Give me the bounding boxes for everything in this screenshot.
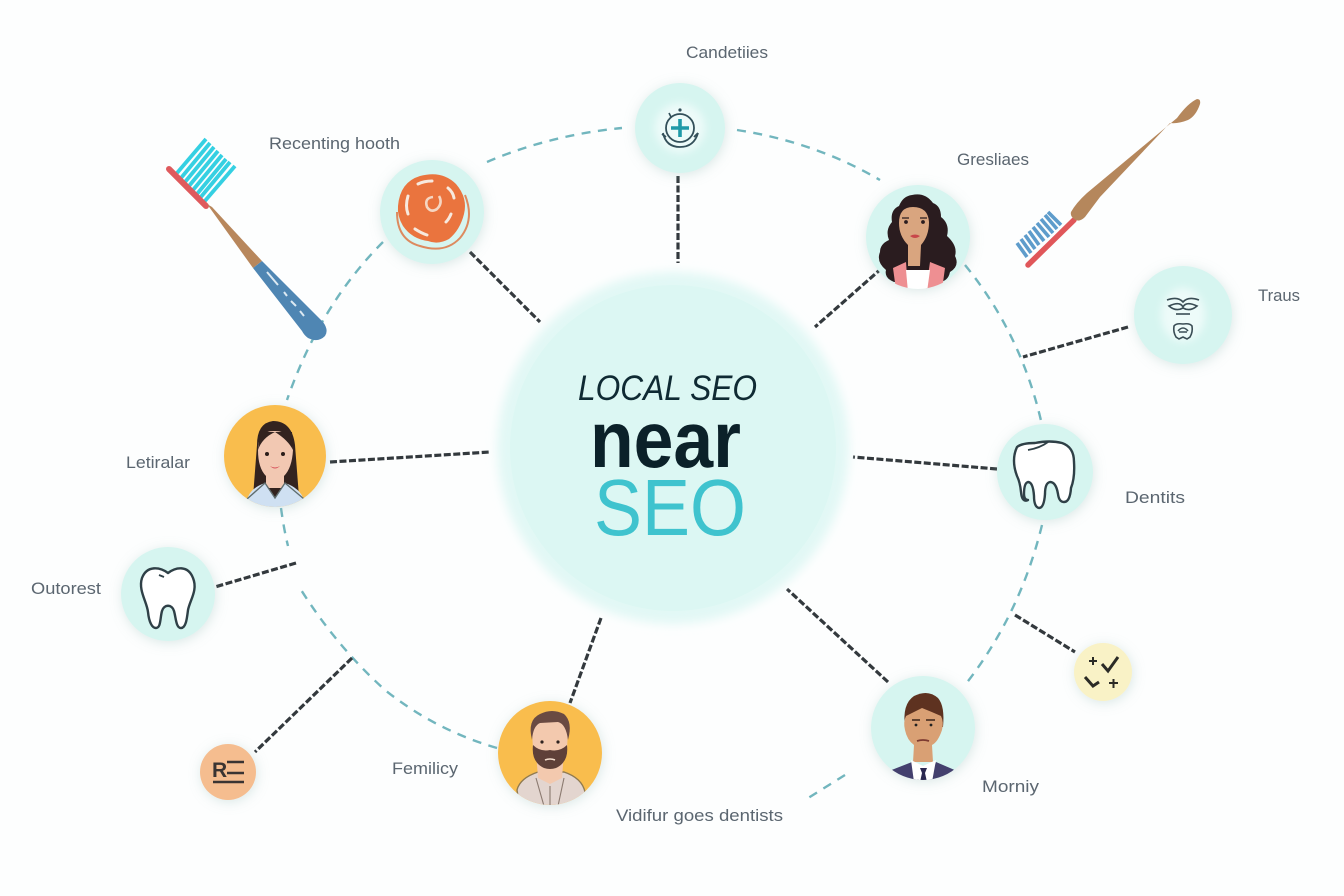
node: Letiralar — [224, 405, 326, 510]
portrait: woman with curly hair — [879, 194, 957, 292]
node: Dentits — [997, 424, 1093, 520]
node: Femilicy — [498, 701, 602, 810]
node: Gresliaes — [866, 185, 970, 292]
title: near: near — [590, 395, 741, 484]
connector lines — [215, 176, 1128, 752]
dashed outer ring — [281, 128, 1042, 800]
title: LOCAL SEO: LOCAL SEO — [578, 369, 757, 408]
label: Femilicy: Femilicy — [392, 759, 459, 778]
icon: tooth — [141, 568, 195, 628]
toothbrush: left — [169, 139, 327, 340]
label: Outorest: Outorest — [31, 579, 101, 598]
portrait: woman with long hair — [247, 421, 304, 510]
node: Outorest — [121, 547, 215, 641]
label: Traus: Traus — [1258, 286, 1300, 305]
node: Recenting hooth — [380, 160, 484, 264]
label: Gresliaes: Gresliaes — [957, 150, 1029, 169]
portrait: man in suit — [892, 693, 954, 780]
node: Morniy — [871, 676, 975, 782]
label: Recenting hooth: Recenting hooth — [269, 134, 400, 153]
icon: medical cross — [662, 108, 698, 147]
title: SEO: SEO — [594, 463, 746, 552]
node: Candetiies — [635, 83, 725, 173]
label: Candetiies: Candetiies — [686, 43, 768, 62]
label: Dentits: Dentits — [1125, 488, 1185, 507]
node: checklist — [1074, 643, 1132, 701]
label: Vidifur goes dentists: Vidifur goes dentists — [616, 806, 783, 825]
icon: face and small tooth — [1167, 298, 1199, 339]
icon: R with lines: R — [212, 759, 227, 782]
node: R= badge — [200, 744, 256, 800]
node: Traus — [1134, 266, 1232, 364]
central hub — [497, 272, 849, 624]
icon: checks and plus signs — [1085, 657, 1118, 688]
portrait: bearded man — [517, 711, 585, 810]
icon: orange swirl — [397, 174, 469, 249]
icon: molar tooth — [1014, 442, 1074, 508]
toothbrush: right — [1017, 99, 1200, 265]
label: Morniy: Morniy — [982, 777, 1040, 796]
label: Letiralar: Letiralar — [126, 453, 190, 472]
